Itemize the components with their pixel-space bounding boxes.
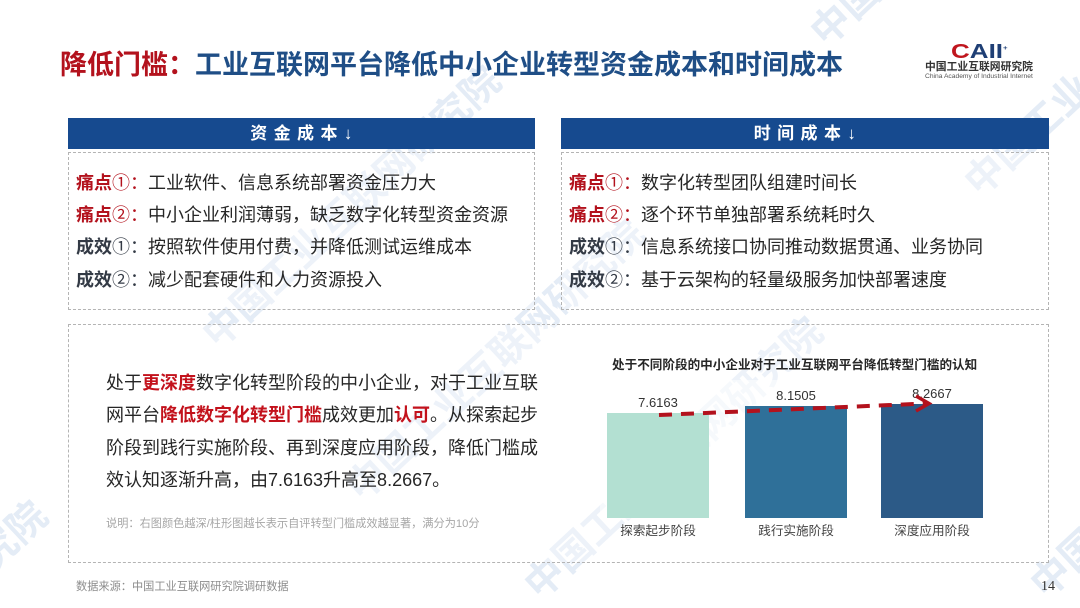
text block: analysis paragraph: 处于更深度数字化转型阶段的中小企业，对于工业互联 [106, 373, 538, 393]
bar: implementation stage: 践行实施阶段 [758, 524, 834, 538]
pain point 1: 数字化转型团队组建时间长 [641, 169, 857, 195]
watermark background: 中国工业互联网研究院 [195, 59, 509, 357]
result 1: 成效①： [76, 233, 148, 259]
logo chinese name: 中国工业互联网研究院 [925, 61, 1033, 73]
result 2: 成效②： [569, 266, 641, 292]
watermark background: 中国工业互联网研究院 [339, 212, 653, 510]
panel heading: time cost [561, 118, 1049, 149]
bar: exploration stage [607, 395, 709, 538]
panel heading: time cost: 时间成本↓ [754, 124, 862, 143]
result 1: 按照软件使用付费，并降低测试运维成本 [148, 233, 472, 259]
result 1: 信息系统接口协同推动数据贯通、业务协同 [641, 233, 983, 259]
bar: deep application stage: 深度应用阶段 [894, 523, 970, 538]
bar chart [600, 380, 983, 538]
text block: analysis paragraph [106, 373, 538, 490]
logo: CAII [925, 41, 1033, 80]
text block: analysis paragraph: 网平台降低数字化转型门槛成效更加认可。从探索起步 [106, 405, 538, 425]
panel: time cost [561, 152, 1049, 310]
bar: exploration stage: 7.6163 [638, 395, 678, 410]
result 1: 成效①： [569, 233, 641, 259]
panel heading: capital cost [68, 118, 535, 149]
arrow: rising trend [659, 396, 929, 415]
panel: analysis [68, 324, 1049, 563]
result 2: 基于云架构的轻量级服务加快部署速度 [641, 266, 947, 292]
pain point 2: 逐个环节单独部署系统耗时久 [641, 201, 875, 227]
result 2: 减少配套硬件和人力资源投入 [148, 266, 382, 292]
pain point 1: 痛点①： [76, 169, 148, 195]
panel: capital cost [68, 152, 535, 310]
bar: deep application stage [881, 386, 983, 538]
pain point 2: 痛点②： [569, 201, 641, 227]
watermark background: 中国工业互联网研究院 [517, 310, 831, 608]
source note: 数据来源：中国工业互联网研究院调研数据 [76, 581, 289, 593]
note: 说明：右图颜色越深/柱形图越长表示自评转型门槛成效越显著，满分为10分 [106, 518, 480, 530]
page number: 14 [1041, 579, 1055, 594]
bar: implementation stage [745, 388, 847, 538]
logo english name: China Academy of Industrial Internet [925, 73, 1033, 80]
bar: deep application stage: 8.2667 [912, 386, 952, 401]
panel heading: capital cost: 资金成本↓ [250, 124, 359, 143]
text block: analysis paragraph: 阶段到践行实施阶段、再到深度应用阶段，降低门槛成 [106, 438, 538, 458]
text block: analysis paragraph: 效认知逐渐升高，由7.6163升高至8.2667。 [106, 470, 450, 490]
chart heading: 处于不同阶段的中小企业对于工业互联网平台降低转型门槛的认知 [612, 358, 977, 372]
logo wordmark: CAII+ [951, 41, 1008, 63]
bar: exploration stage: 探索起步阶段 [620, 524, 696, 538]
pain point 1: 工业软件、信息系统部署资金压力大 [148, 169, 436, 195]
result 2: 成效②： [76, 266, 148, 292]
bar: implementation stage: 8.1505 [776, 388, 816, 403]
pain point 1: 痛点①： [569, 169, 641, 195]
title: 降低门槛：工业互联网平台降低中小企业转型资金成本和时间成本 [60, 50, 843, 80]
pain point 2: 痛点②： [76, 201, 148, 227]
pain point 2: 中小企业利润薄弱，缺乏数字化转型资金资源 [148, 201, 508, 227]
